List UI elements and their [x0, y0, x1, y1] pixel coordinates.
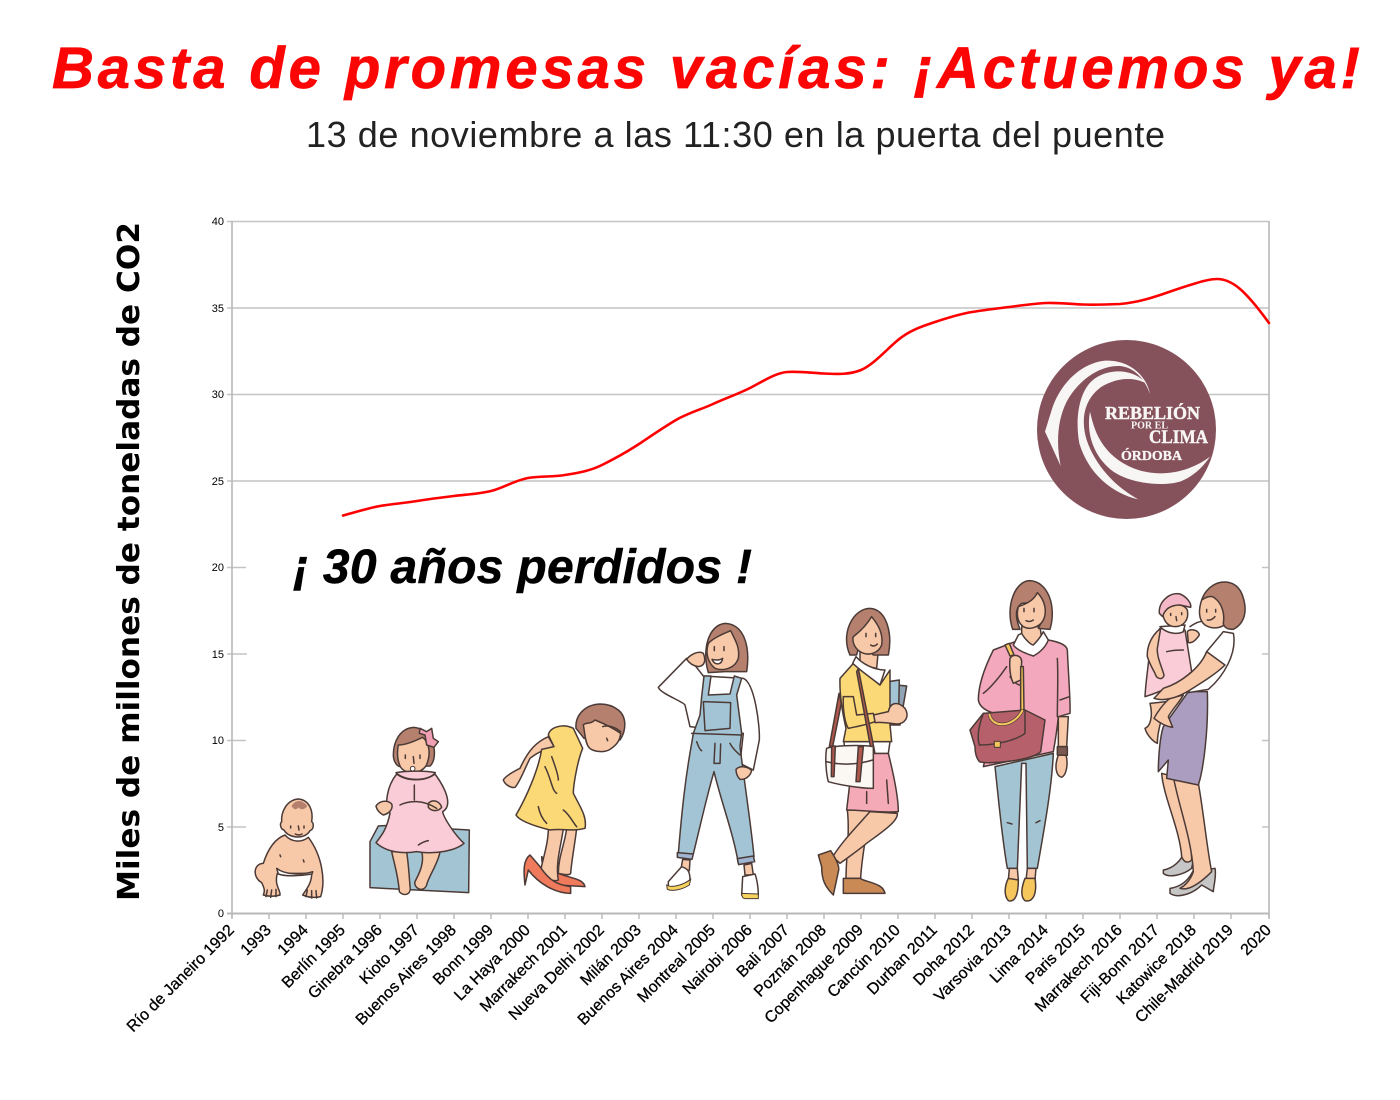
- y axis labels: 40: [212, 216, 224, 228]
- y axis labels: 25: [212, 476, 224, 488]
- x axis labels: Durban 2011: [864, 922, 941, 998]
- y axis labels: 35: [212, 303, 224, 315]
- illustration: baby crawling: [255, 799, 323, 898]
- x axis labels: 1994: [275, 922, 312, 959]
- logo: Rebelión por el Clima Córdoba: CLIMA: [1149, 428, 1209, 448]
- x axis labels: Poznán 2008: [751, 922, 830, 1001]
- x axis labels: Copenhague 2009: [762, 922, 867, 1027]
- x axis labels: Bali 2007: [734, 922, 793, 981]
- x axis labels: Ginebra 1996: [305, 922, 386, 1002]
- x axis labels: Chile-Madrid 2019: [1132, 922, 1237, 1026]
- x axis labels: Varsovia 2013: [931, 922, 1015, 1005]
- illustration: student with bag and books: [818, 608, 907, 895]
- illustration: mother holding baby: [1145, 582, 1245, 896]
- x axis labels: La Haya 2000: [451, 922, 534, 1004]
- x axis labels: 2020: [1238, 922, 1275, 959]
- x axis labels: Nairobi 2006: [680, 922, 756, 998]
- y axis labels: 10: [212, 735, 224, 747]
- x axis labels: Marrakech 2001: [477, 922, 571, 1016]
- x axis labels: Bonn 1999: [430, 922, 497, 989]
- illustration: woman with handbag: [970, 581, 1070, 901]
- illustration: teenager in overalls: [658, 623, 759, 899]
- x axis labels: Cancún 2010: [824, 922, 904, 1001]
- x axis labels: [124, 922, 1275, 1036]
- x axis labels: Buenos Aires 2004: [575, 922, 682, 1029]
- chart frame and gridlines: [227, 221, 1269, 919]
- x axis labels: Kioto 1997: [357, 922, 423, 988]
- x axis labels: Milán 2003: [577, 922, 645, 989]
- y axis labels: 5: [218, 822, 224, 834]
- x axis labels: 1993: [238, 922, 275, 959]
- title: Basta de promesas vacías: ¡Actuemos ya!: [52, 36, 1360, 101]
- logo: Rebelión por el Clima Córdoba: REBELIÓN: [1105, 403, 1200, 423]
- x axis labels: Nueva Delhi 2002: [506, 922, 608, 1024]
- illustration: toddler on box: [370, 727, 469, 894]
- y axis labels: 0: [218, 908, 224, 920]
- x axis labels: Montreal 2005: [634, 922, 719, 1006]
- subtitle: 13 de noviembre a las 11:30 en la puerta del puente: [306, 114, 1165, 155]
- y axis labels: 20: [212, 562, 224, 574]
- illustration: girl in yellow dress and heels: [503, 704, 625, 893]
- logo: Rebelión por el Clima Córdoba: POR EL: [1131, 420, 1168, 432]
- CO2 emissions line: [343, 279, 1269, 516]
- x axis labels: Paris 2015: [1023, 922, 1089, 988]
- x axis labels: Río de Janeiro 1992: [124, 922, 238, 1036]
- y axis title: Miles de millones de toneladas de CO2: [112, 222, 147, 901]
- x axis labels: Doha 2012: [910, 922, 978, 989]
- x axis labels: Buenos Aires 1998: [353, 922, 460, 1029]
- y axis labels: [212, 216, 224, 920]
- y axis labels: 15: [212, 649, 224, 661]
- x axis labels: Fiji-Bonn 2017: [1078, 922, 1163, 1007]
- x axis labels: Lima 2014: [987, 922, 1052, 987]
- y axis labels: 30: [212, 389, 224, 401]
- x axis labels: Katowice 2018: [1114, 922, 1200, 1008]
- callout: 30 años perdidos: ¡ 30 años perdidos !: [293, 541, 752, 594]
- logo: Rebelión por el Clima Córdoba: [1037, 340, 1216, 519]
- x axis labels: Marrakech 2016: [1032, 922, 1126, 1016]
- logo: Rebelión por el Clima Córdoba: ÓRDOBA: [1121, 448, 1182, 463]
- x axis labels: Berlín 1995: [279, 922, 349, 992]
